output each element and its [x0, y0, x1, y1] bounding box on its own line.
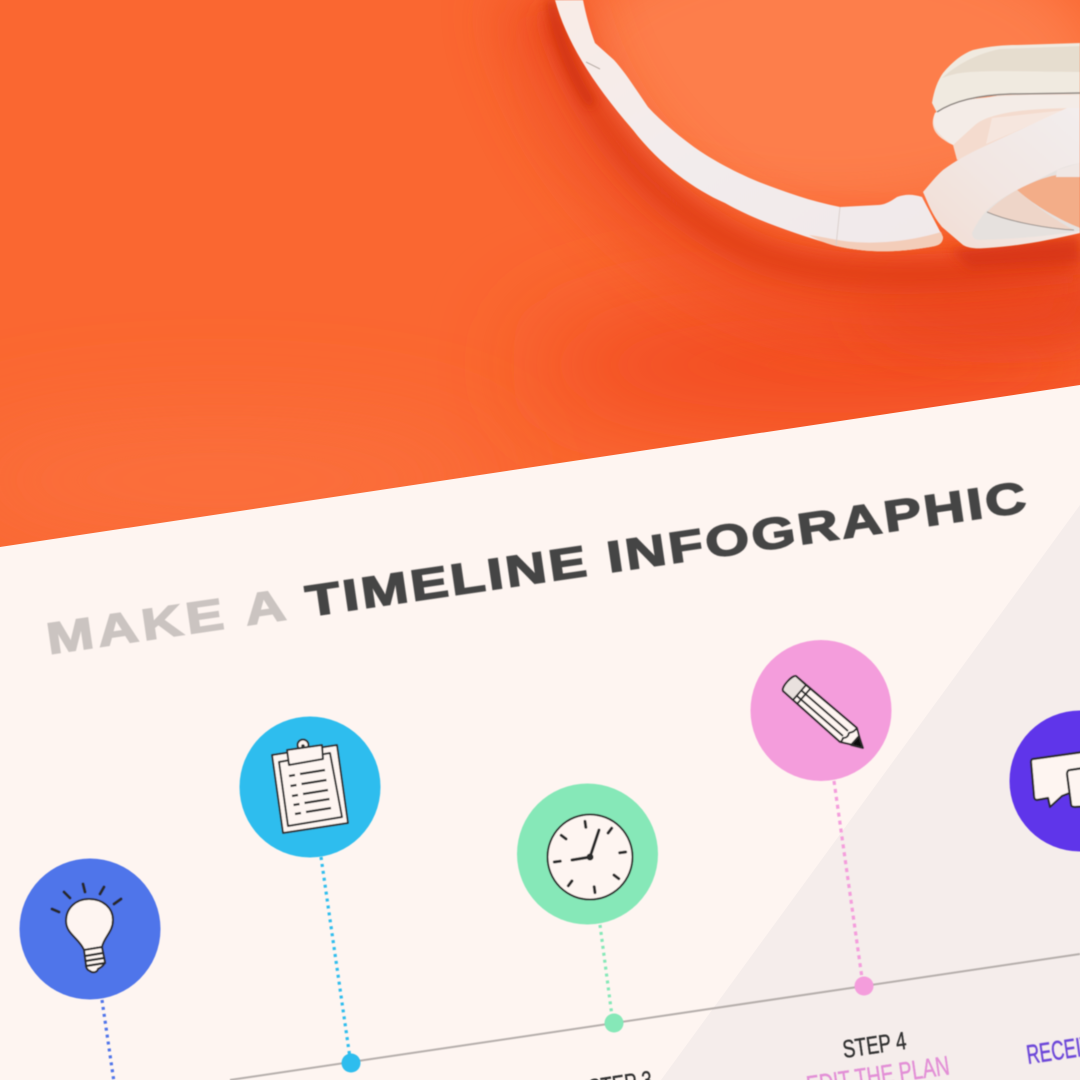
step 4 [750, 640, 951, 1080]
icon: pencil [783, 676, 863, 748]
step 1 [20, 858, 160, 1080]
step 3 [517, 784, 658, 1080]
ear cushion [932, 43, 1080, 113]
inner loop opening [972, 163, 1080, 240]
headphones [555, 0, 1080, 251]
step 2 [240, 716, 380, 1072]
icon: speech bubbles [1031, 751, 1080, 807]
icon circle 5 [1010, 710, 1080, 852]
step 4 label [805, 1027, 951, 1080]
marker 3 [604, 1014, 624, 1032]
icon: clipboard [272, 740, 348, 833]
ear cup base [933, 92, 1080, 160]
icon circle 4 [750, 640, 892, 781]
title [43, 472, 1029, 664]
headband [555, 0, 943, 251]
folding loop [923, 108, 1080, 248]
title: make a: MAKE A [43, 580, 289, 664]
marker 2 [342, 1054, 360, 1072]
step 4 number: STEP 4 [841, 1027, 908, 1064]
step 5 [1010, 710, 1080, 1070]
orange photo background [0, 0, 1080, 560]
title: timeline infographic: TIMELINE INFOGRAPHIC [302, 472, 1029, 626]
connector 1 [102, 1000, 114, 1080]
icon: light bulb [52, 884, 121, 972]
marker 4 [854, 976, 874, 996]
icon: clock [548, 814, 632, 900]
white panel [0, 385, 1080, 1080]
connector 2 [321, 857, 350, 1058]
icon circle 3 [517, 784, 658, 924]
icon circle 1 [20, 858, 160, 1000]
diagonal shade [661, 505, 1080, 1080]
connector 3 [600, 925, 612, 1016]
icon circle 2 [240, 716, 380, 858]
connector 4 [834, 781, 862, 978]
timeline axis [230, 954, 1080, 1080]
